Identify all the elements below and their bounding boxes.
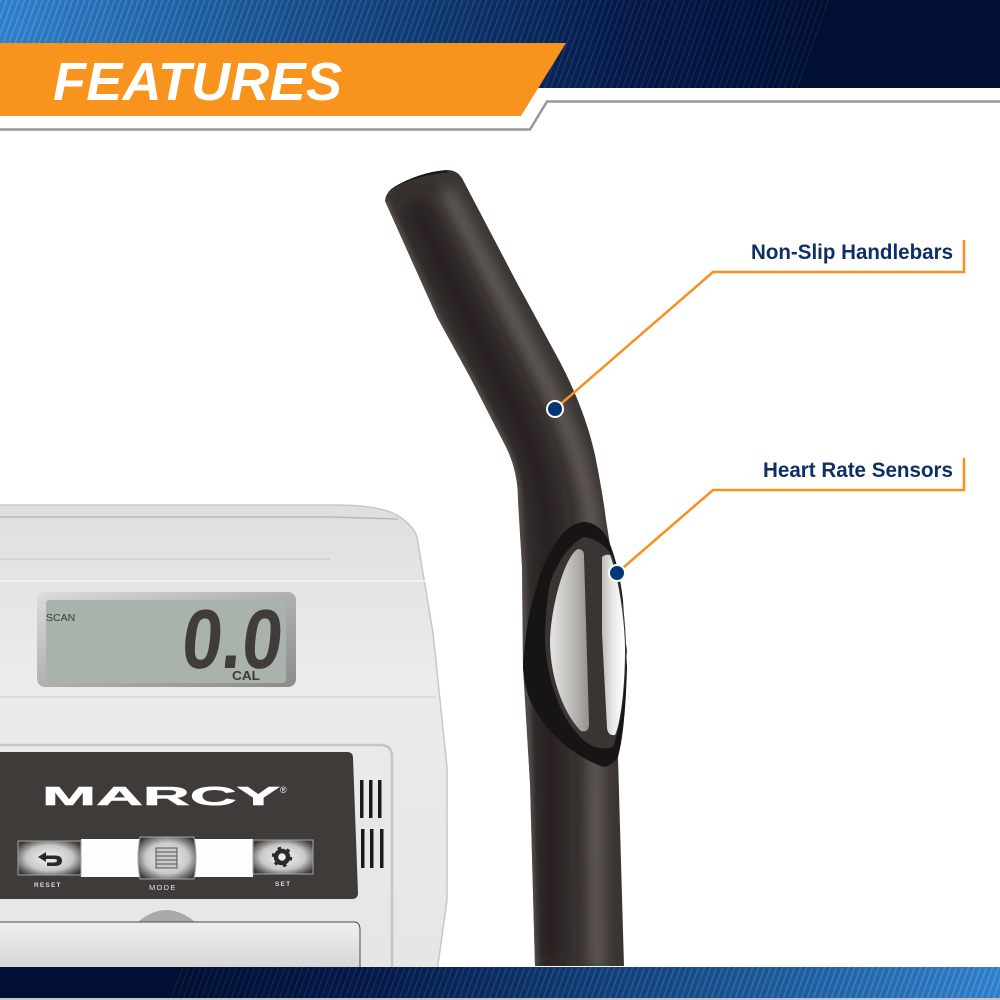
header band (0, 0, 1000, 88)
vents (360, 780, 384, 868)
LCD reading: 0.0 (178, 592, 288, 686)
heading: features: FEATURES (53, 52, 342, 112)
control panel (0, 752, 358, 899)
label: Non-Slip Handlebars (751, 241, 953, 264)
control panel frame (0, 745, 392, 967)
right sensor plate (602, 555, 625, 735)
brand logo (42, 781, 287, 811)
mode label: MODE (149, 883, 177, 892)
marker dot (609, 565, 625, 581)
mode button (138, 837, 196, 879)
LCD scan label: SCAN (46, 612, 75, 624)
LCD cal label: CAL (232, 669, 260, 683)
callout: heart rate sensors (609, 458, 964, 581)
set label: SET (275, 881, 291, 888)
callout: non-slip handlebars (547, 240, 964, 417)
console housing (0, 505, 447, 972)
brand logo: ® (280, 785, 287, 795)
sensor housing (523, 522, 627, 767)
footer band (0, 967, 1000, 1000)
LCD display (37, 592, 296, 687)
marker dot (547, 401, 563, 417)
handlebar (385, 170, 627, 966)
header gray rule (0, 102, 1000, 130)
lower tray (0, 910, 360, 972)
reset button (18, 841, 81, 875)
left sensor plate (550, 549, 589, 731)
heading banner (0, 43, 566, 116)
set button (253, 840, 313, 874)
reset label: RESET (34, 882, 62, 889)
brand logo: MARCY (42, 781, 280, 811)
white button strip (81, 839, 253, 877)
label: Heart Rate Sensors (763, 459, 953, 482)
